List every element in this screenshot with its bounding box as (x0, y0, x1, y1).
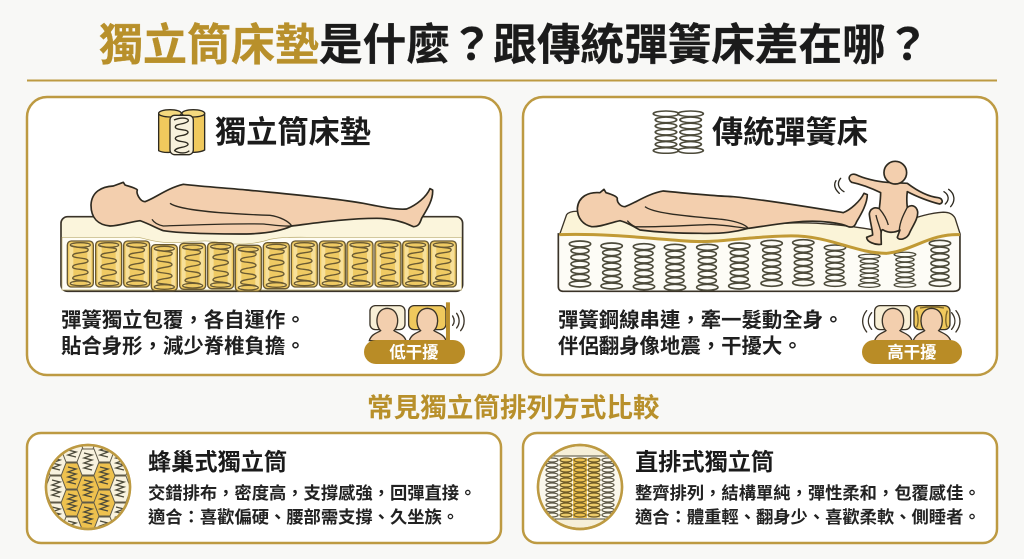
panel: honeycomb arrangement (27, 433, 501, 543)
icon: straight rows pattern (535, 445, 625, 529)
icon: couple high disturbance (863, 306, 960, 341)
badge: high disturbance: 高干擾 (887, 343, 937, 362)
motion lines (835, 178, 954, 207)
person lying down (577, 189, 867, 233)
heading: pocket spring mattress: 獨立筒床墊 (215, 115, 371, 150)
text: honeycomb description: 交錯排布，密度高，支撐感強，回彈直接。 (148, 483, 476, 503)
heading: arrangement comparison: 常見獨立筒排列方式比較 (367, 393, 660, 423)
heading: traditional spring mattress: 傳統彈簧床 (712, 115, 868, 150)
icon: honeycomb pattern (44, 444, 132, 530)
child jumping (849, 161, 942, 244)
illustration: pocket mattress (61, 182, 463, 291)
text: traditional drawbacks (558, 308, 843, 358)
text: straight description (635, 483, 981, 527)
icon: couple low disturbance (369, 302, 464, 341)
icon: pocket spring (159, 110, 205, 155)
text: pocket benefits (61, 308, 306, 358)
badge: low disturbance (364, 340, 465, 364)
person lying down (91, 182, 433, 234)
icon: connected springs (653, 111, 703, 153)
badge: high disturbance (862, 340, 962, 364)
text: straight description: 適合：體重輕、翻身少、喜歡柔軟、側睡者。 (635, 507, 981, 527)
heading: straight: 直排式獨立筒 (635, 449, 774, 475)
text: honeycomb description (148, 483, 476, 527)
text: honeycomb description: 適合：喜歡偏硬、腰部需支撐、久坐族。 (148, 507, 459, 527)
panel: traditional spring mattress (523, 97, 997, 375)
text: straight description: 整齊排列，結構單純，彈性柔和，包覆感佳。 (635, 483, 981, 503)
badge: low disturbance: 低干擾 (389, 343, 439, 362)
text: traditional drawbacks: 彈簧鋼線串連，牽一髮動全身。 (558, 308, 843, 332)
heading: honeycomb: 蜂巢式獨立筒 (148, 449, 287, 475)
text: pocket benefits: 貼合身形，減少脊椎負擔。 (61, 334, 306, 358)
panel: straight arrangement (523, 433, 997, 543)
text: pocket benefits: 彈簧獨立包覆，各自運作。 (61, 308, 306, 332)
illustration: traditional mattress (558, 161, 960, 291)
panel: pocket spring mattress (27, 97, 501, 375)
title: 獨立筒床墊是什麼？跟傳統彈簧床差在哪？ (99, 21, 929, 70)
text: traditional drawbacks: 伴侶翻身像地震，干擾大。 (558, 335, 803, 358)
